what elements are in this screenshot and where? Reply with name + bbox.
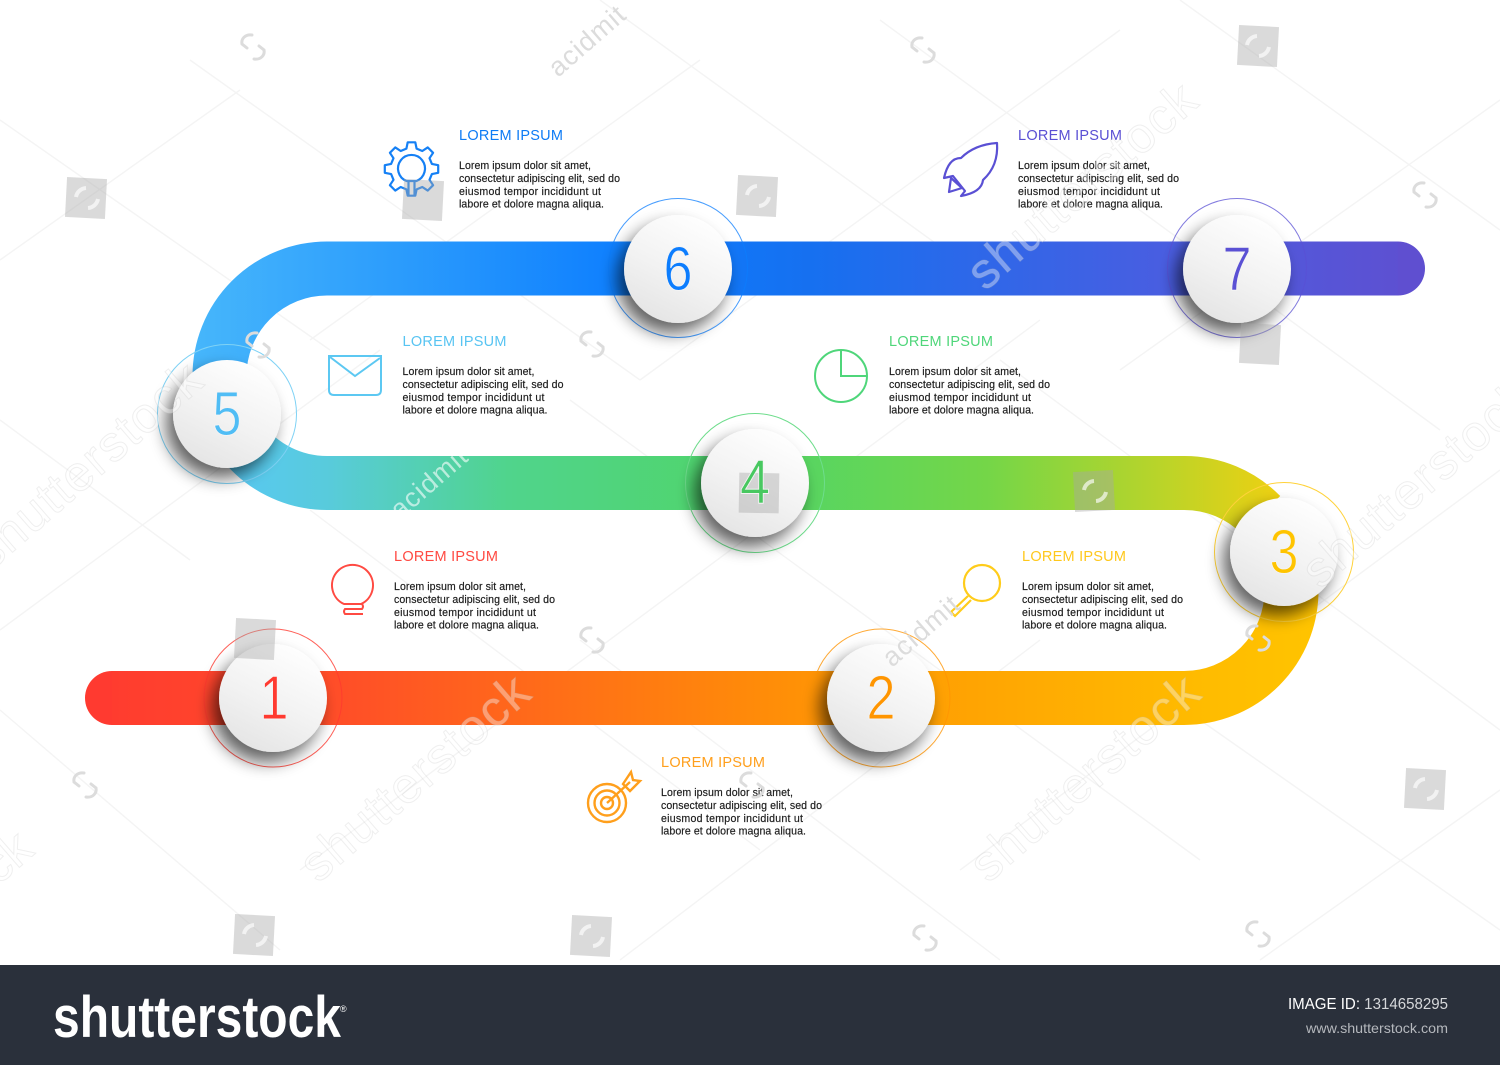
text block: step 5: eiusmod tempor incididunt ut <box>402 392 545 404</box>
text block: step 2: eiusmod tempor incididunt ut <box>661 813 803 825</box>
icon: rocket <box>944 143 997 196</box>
text block: step 4: eiusmod tempor incididunt ut <box>889 392 1031 404</box>
step 3 marker <box>1214 482 1354 622</box>
footer bar <box>0 965 1500 1065</box>
registered mark: ® <box>340 1004 347 1014</box>
text block: step 1: LOREM IPSUM <box>394 549 498 565</box>
icon: envelope <box>329 356 381 395</box>
text block: step 4 <box>889 334 1050 416</box>
text block: step 5 <box>402 334 564 416</box>
watermark overlays: acidmit <box>542 0 632 83</box>
text block: step 6 <box>459 128 620 210</box>
text block: step 7 <box>1018 128 1179 210</box>
watermark overlays: shutterstock <box>288 662 541 892</box>
icon: light bulb <box>332 565 373 614</box>
watermark overlays: shutterstock <box>958 662 1211 892</box>
text block: step 7: labore et dolore magna aliqua. <box>1018 198 1163 210</box>
text block: step 7: Lorem ipsum dolor sit amet, <box>1018 160 1150 172</box>
step 2 marker <box>812 629 950 767</box>
watermark overlays: acidmit <box>384 441 474 525</box>
text block: step 2: LOREM IPSUM <box>661 755 765 771</box>
step 2 marker: 2 <box>866 664 896 733</box>
text block: step 1: eiusmod tempor incididunt ut <box>394 607 536 619</box>
winding road track <box>85 242 1425 725</box>
text block: step 1: consectetur adipiscing elit, sed do <box>394 594 555 606</box>
step 5 marker: 5 <box>212 380 242 449</box>
text block: step 3: consectetur adipiscing elit, sed do <box>1022 594 1183 606</box>
text block: step 3: Lorem ipsum dolor sit amet, <box>1022 581 1154 593</box>
image id: IMAGE ID: 1314658295 <box>1288 996 1448 1013</box>
icon: gear <box>385 142 438 196</box>
text block: step 3: labore et dolore magna aliqua. <box>1022 620 1167 632</box>
step 4 numeral: 4 <box>740 448 770 517</box>
text block: step 6: Lorem ipsum dolor sit amet, <box>459 160 591 172</box>
step 7 marker: 7 <box>1222 235 1252 304</box>
text block: step 3: LOREM IPSUM <box>1022 549 1126 565</box>
text block: step 1: Lorem ipsum dolor sit amet, <box>394 581 526 593</box>
text block: step 2: Lorem ipsum dolor sit amet, <box>661 787 793 799</box>
footer logo: shutterstock <box>53 985 342 1050</box>
text block: step 6: labore et dolore magna aliqua. <box>459 198 604 210</box>
text block: step 4: labore et dolore magna aliqua. <box>889 404 1034 416</box>
text block: step 3 <box>1022 549 1183 632</box>
step 6 marker <box>608 198 748 338</box>
text block: step 6: LOREM IPSUM <box>459 128 563 144</box>
text block: step 1 <box>394 549 555 632</box>
text block: step 7: LOREM IPSUM <box>1018 128 1122 144</box>
text block: step 1: labore et dolore magna aliqua. <box>394 620 539 632</box>
track segment: top row from step 5 to end <box>220 268 1398 400</box>
track segment: bottom row from start to step 3 <box>112 590 1292 698</box>
text block: step 4: Lorem ipsum dolor sit amet, <box>889 366 1021 378</box>
step 6 marker: 6 <box>664 235 692 304</box>
text block: step 7: consectetur adipiscing elit, sed do <box>1018 173 1179 185</box>
website: www.shutterstock.com <box>1305 1020 1448 1036</box>
track end cap: bottom left <box>85 671 112 725</box>
step 1 marker <box>204 629 342 767</box>
text block: step 2: consectetur adipiscing elit, sed do <box>661 800 822 812</box>
step 1 marker: 1 <box>260 664 288 733</box>
text block: step 5: Lorem ipsum dolor sit amet, <box>402 366 534 378</box>
text block: step 6: eiusmod tempor incididunt ut <box>459 186 601 198</box>
watermark overlays: shutterstock <box>955 70 1208 300</box>
step 3 marker: 3 <box>1270 518 1298 587</box>
icon: target with arrow <box>588 772 640 822</box>
text block: step 4: LOREM IPSUM <box>889 334 993 350</box>
text block: step 5: consectetur adipiscing elit, sed do <box>402 379 564 391</box>
text block: step 7: eiusmod tempor incididunt ut <box>1018 186 1160 198</box>
icon: key <box>951 565 1000 616</box>
text block: step 4: consectetur adipiscing elit, sed do <box>889 379 1050 391</box>
text block: step 2 <box>661 755 822 838</box>
text block: step 6: consectetur adipiscing elit, sed do <box>459 173 620 185</box>
track segment: middle row from step 5 to step 3 <box>241 440 1261 515</box>
step 7 marker <box>1168 198 1306 338</box>
text block: step 2: labore et dolore magna aliqua. <box>661 826 806 838</box>
text block: step 3: eiusmod tempor incididunt ut <box>1022 607 1164 619</box>
text block: step 5: labore et dolore magna aliqua. <box>402 404 548 416</box>
track end cap: top right <box>1398 242 1425 296</box>
step 4 marker <box>686 414 824 552</box>
text block: step 5: LOREM IPSUM <box>402 334 506 350</box>
step 5 marker <box>158 344 296 484</box>
watermark overlays: acidmit <box>876 589 966 673</box>
icon: clock <box>815 350 867 402</box>
